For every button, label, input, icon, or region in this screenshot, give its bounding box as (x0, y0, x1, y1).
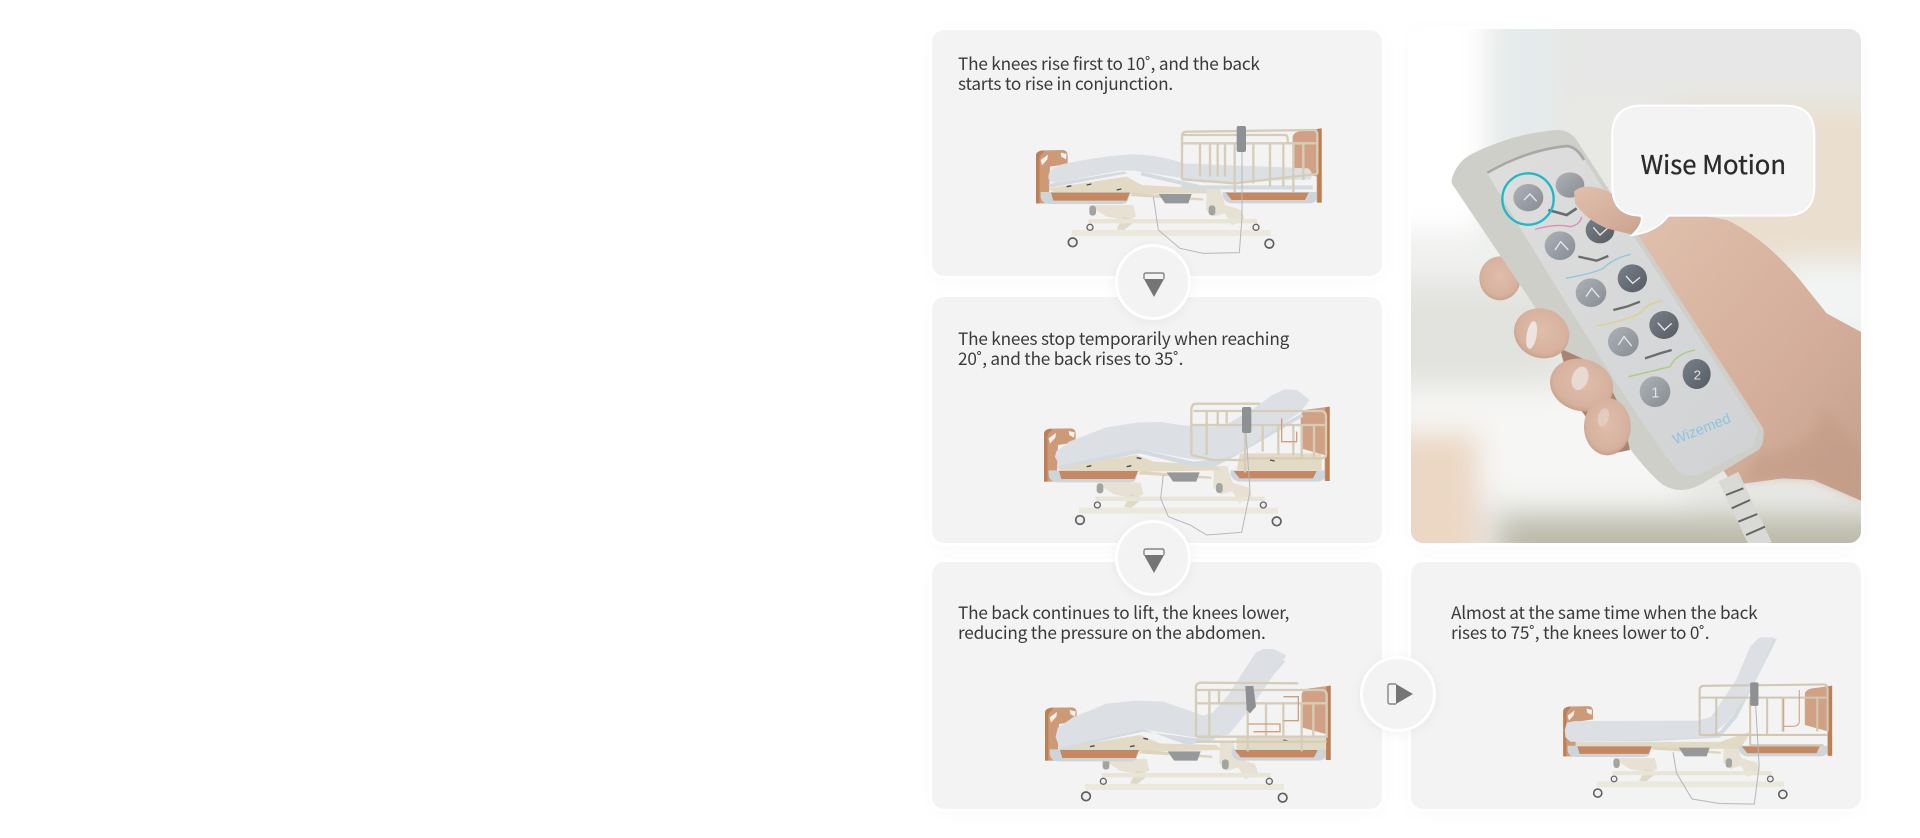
cord (1726, 477, 1765, 547)
step 2 text (958, 325, 1290, 370)
step 1 text: The knees rise first to 10˚, and the back (958, 50, 1260, 75)
teal highlight ring (1502, 173, 1554, 225)
bed: knees raised 10 degrees (1036, 126, 1322, 254)
panel: step 1 (932, 30, 1382, 276)
bed: back lifting, knees lowering (1045, 649, 1331, 803)
photo background (1367, 0, 1900, 577)
arrow: step 1 to step 2 (1115, 244, 1191, 320)
speech bubble: Wise Motion (1641, 145, 1786, 182)
panel: step 2 (932, 297, 1382, 543)
step 3 text: The back continues to lift, the knees lower, (958, 599, 1289, 624)
hand: thumb (1574, 186, 1653, 235)
step 4 text: Almost at the same time when the back (1451, 599, 1757, 624)
arrow: step 3 to step 4 (1360, 656, 1436, 732)
remote control (1452, 130, 1764, 490)
hand: back of hand (1479, 216, 1863, 502)
panel: step 3 (932, 562, 1382, 809)
hand: fingers (1507, 301, 1631, 455)
step 3 text (958, 599, 1289, 644)
speech bubble (1612, 106, 1814, 235)
step 2 text: 20˚, and the back rises to 35˚. (958, 345, 1183, 370)
remote buttons: 2 (1694, 367, 1701, 382)
panel: remote control photo (1411, 29, 1861, 543)
panel: step 4 (1411, 562, 1861, 809)
step 4 text (1451, 599, 1758, 644)
bed: back raised 75 degrees, knees flat (1563, 638, 1832, 805)
step 3 text: reducing the pressure on the abdomen. (958, 619, 1266, 644)
remote buttons (1513, 172, 1711, 407)
remote wavy lines (1535, 208, 1695, 377)
step 2 text: The knees stop temporarily when reaching (958, 325, 1289, 350)
remote buttons: 1 (1651, 385, 1659, 401)
step 1 text: starts to rise in conjunction. (958, 70, 1173, 95)
remote logo: Wizemed (1671, 411, 1733, 448)
step 4 text: rises to 75˚, the knees lower to 0˚. (1451, 619, 1709, 644)
step 1 text (958, 50, 1260, 95)
arrow: step 2 to step 3 (1115, 520, 1191, 596)
bed: back rising to 35 degrees (1044, 390, 1330, 536)
